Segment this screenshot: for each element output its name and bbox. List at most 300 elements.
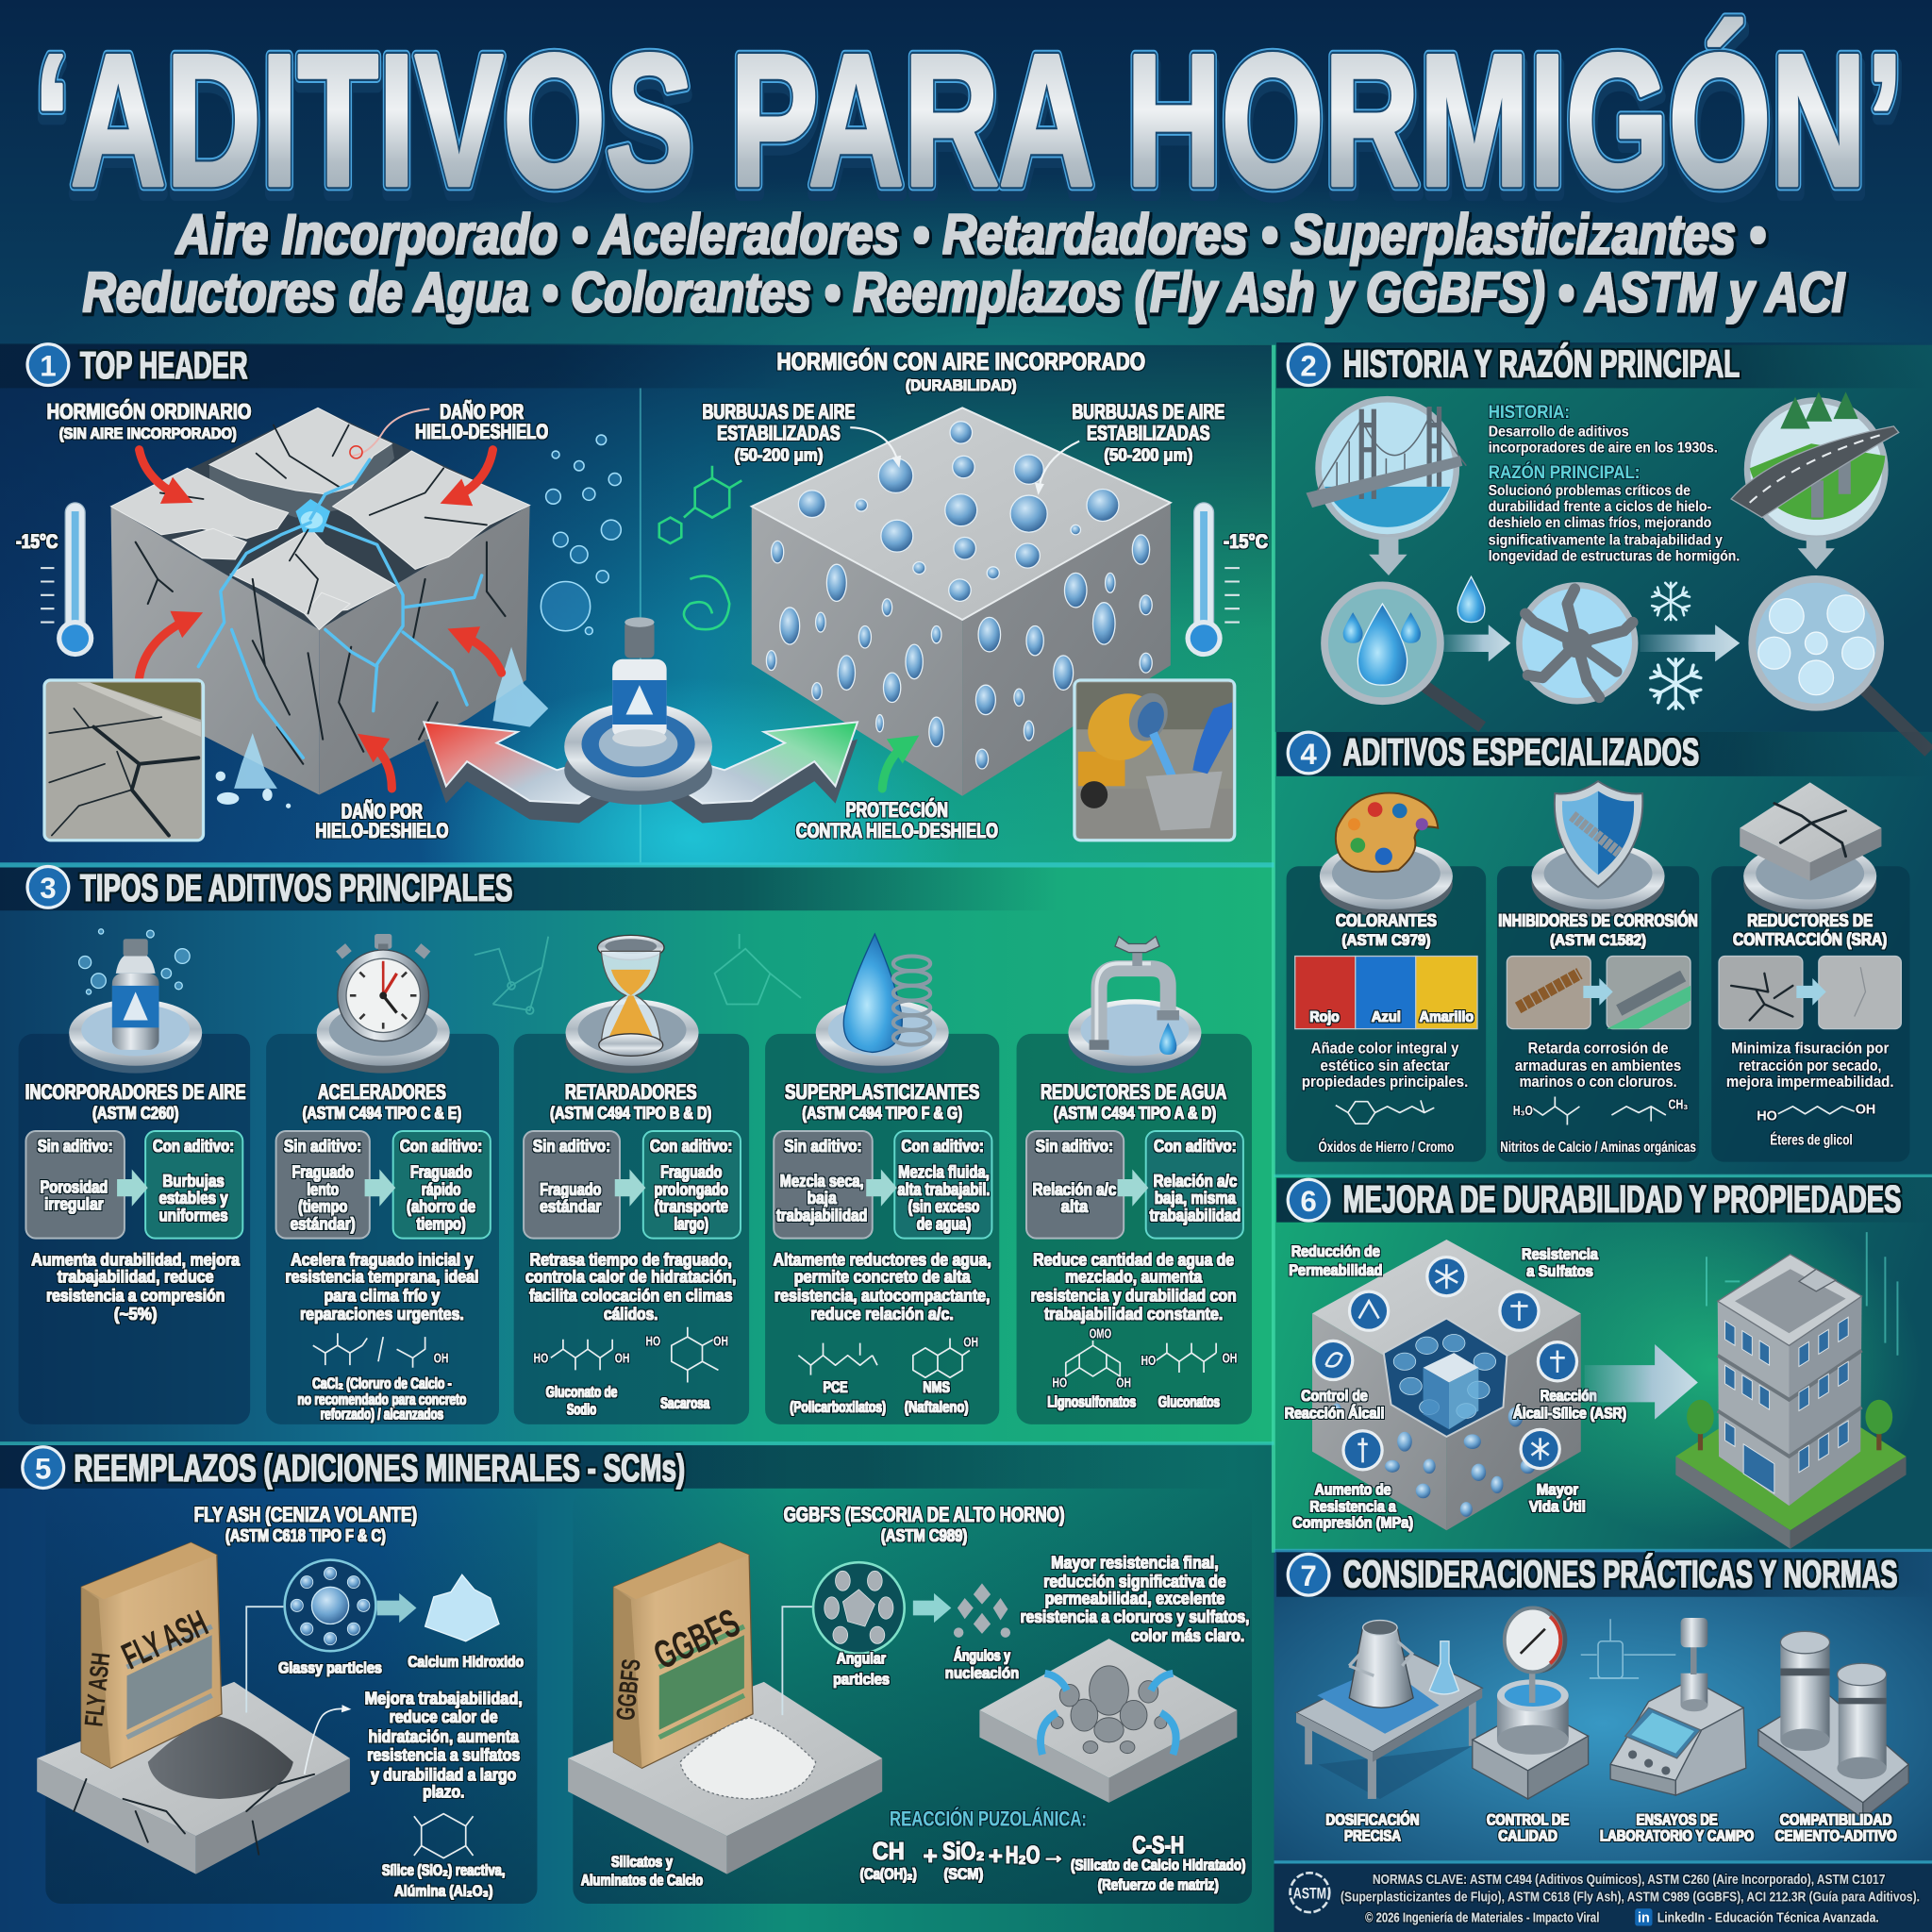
panel 7: consideraciones practicas <box>1276 1552 1932 1926</box>
labels around cube: Permeabilidad <box>1289 1261 1382 1279</box>
text: historia: HISTORIA: <box>1489 402 1570 423</box>
description: trabajabilidad constante. <box>1044 1304 1223 1324</box>
description: estético sin afectar <box>1321 1057 1450 1074</box>
comparison: Sin aditivo: <box>533 1136 610 1156</box>
photo: cracked pavement <box>44 680 204 841</box>
label: burbujas left: ESTABILIZADAS <box>717 421 841 444</box>
label: hormigon ordinario: HORMIGÓN ORDINARIO <box>47 398 251 424</box>
description: propiedades principales. <box>1302 1073 1468 1091</box>
comparison: alta <box>1061 1196 1089 1216</box>
label: Nitritos de Calcio / Aminas orgánicas <box>1500 1140 1696 1156</box>
comparison <box>25 1131 242 1239</box>
equation <box>860 1830 1245 1894</box>
comparison: Sin aditivo: <box>284 1136 361 1156</box>
description <box>285 1249 478 1324</box>
label: burbujas left <box>702 400 855 464</box>
equation: (Ca(OH)₂) <box>860 1865 917 1883</box>
labels: Calcium Hidroxido <box>408 1653 524 1671</box>
labels around cube: Álcali-Sílice (ASR) <box>1513 1404 1626 1422</box>
labels: CALIDAD <box>1498 1826 1557 1844</box>
labels around cube: Reacción <box>1541 1387 1597 1405</box>
icon: reaction slab <box>979 1639 1237 1803</box>
arrow: green protection <box>882 741 909 789</box>
heading 2: 2 <box>1300 349 1317 382</box>
icon: snowflake top <box>1652 583 1690 620</box>
equation: SiO₂ <box>942 1837 985 1865</box>
comparison: estándar <box>540 1196 601 1216</box>
arrow: down left <box>1369 537 1407 575</box>
molecules and labels: Sodio <box>567 1400 596 1418</box>
heading 3: TIPOS DE ADITIVOS PRINCIPALES <box>80 866 512 909</box>
icon: slab <box>37 1682 350 1874</box>
equation: → <box>1041 1840 1066 1869</box>
heading 3: 3 <box>40 872 57 905</box>
labels around cube: Reacción Álcali <box>1285 1404 1384 1422</box>
description <box>365 1688 523 1802</box>
molecules and labels <box>534 1327 728 1418</box>
thermometer right <box>1185 503 1240 657</box>
description: Minimiza fisuración por <box>1731 1040 1890 1058</box>
heading 5: 5 <box>35 1452 51 1485</box>
text: historia: durabilidad frente a ciclos de hielo- <box>1489 499 1711 515</box>
description: resistencia, autocompactante, <box>774 1285 990 1305</box>
description: Acelera fraguado inicial y <box>291 1249 474 1269</box>
comparison: tiempo) <box>416 1214 466 1234</box>
text: historia: incorporadores de aire en los 1930s. <box>1489 440 1718 456</box>
title: SUPERPLASTICIZANTES <box>785 1080 979 1104</box>
card: inhibidores <box>1497 781 1699 1162</box>
labels: COMPATIBILIDAD <box>1780 1810 1892 1828</box>
icon: calcium hydroxide <box>425 1574 499 1641</box>
comparison <box>276 1131 491 1239</box>
molecules and labels: HO <box>645 1334 660 1349</box>
title: INHIBIDORES DE CORROSIÓN <box>1498 910 1698 930</box>
icon: white powder pile <box>680 1718 816 1799</box>
description: Mayor resistencia final, <box>1051 1553 1219 1573</box>
arrow <box>377 1593 416 1623</box>
heading 4: 4 <box>1300 738 1317 771</box>
copyright <box>1365 1908 1879 1926</box>
label: hormigon ordinario <box>47 398 251 442</box>
molecules and label: CaCl₂ (Cloruro de Calcio - <box>312 1374 452 1392</box>
comparison: uniformes <box>158 1205 228 1224</box>
panel: fly ash <box>37 1491 537 1904</box>
description: resistencia y durabilidad con <box>1031 1285 1237 1305</box>
text: historia: Desarrollo de aditivos <box>1489 424 1629 440</box>
icon: astm logo: ASTM <box>1293 1885 1326 1903</box>
label: burbujas right: (50-200 μm) <box>1104 444 1192 464</box>
comparison: Con aditivo: <box>650 1136 732 1156</box>
equation: (Silicato de Calcio Hidratado) <box>1071 1857 1245 1874</box>
description <box>1726 1040 1894 1091</box>
arrow: water to ice <box>1441 625 1510 661</box>
description: mezclado, aumenta <box>1065 1267 1203 1287</box>
labels around cube: Reducción de <box>1291 1242 1380 1260</box>
description: para clima frío y <box>325 1285 441 1305</box>
icon: lab machine <box>1610 1618 1746 1795</box>
card: retardadores <box>514 935 749 1424</box>
icon: faucet <box>1068 937 1201 1074</box>
icon: ggbfs bag <box>610 1542 753 1768</box>
molecules and labels: OH <box>1223 1352 1237 1367</box>
card: reductores de agua <box>1017 937 1252 1424</box>
molecules and labels: Gluconatos <box>1158 1393 1220 1411</box>
title <box>25 1080 246 1123</box>
description: plazo. <box>423 1782 464 1802</box>
equation: H₂O <box>1006 1840 1040 1869</box>
icon: air entrained cube <box>752 408 1171 796</box>
comparison <box>774 1131 991 1239</box>
title: (ASTM C494 TIPO B & D) <box>550 1103 711 1123</box>
title: REDUCTORES DE AGUA <box>1041 1080 1226 1104</box>
card: reductores contraccion <box>1711 782 1909 1162</box>
description <box>31 1249 241 1324</box>
title ggbfs: GGBFS (ESCORIA DE ALTO HORNO) <box>784 1503 1064 1526</box>
icon: snowflake bottom <box>1651 659 1701 708</box>
comparison: (ahorro de <box>407 1196 475 1216</box>
heading 7: 7 <box>1300 1559 1317 1592</box>
labels around cube: Compresión (MPa) <box>1292 1514 1413 1532</box>
label: burbujas right: ESTABILIZADAS <box>1087 421 1210 444</box>
title <box>1041 1080 1226 1123</box>
icon: fly ash bag <box>78 1542 222 1768</box>
comparison: baja, misma <box>1155 1188 1237 1208</box>
comparison: Sin aditivo: <box>784 1136 862 1156</box>
description <box>1302 1040 1468 1091</box>
molecules: H₃O <box>1513 1104 1533 1119</box>
footer <box>1291 1872 1920 1926</box>
icon: additive bottle on platform <box>564 617 712 805</box>
panel 6: mejora de durabilidad <box>1276 1177 1932 1549</box>
title <box>785 1080 979 1123</box>
subtitle <box>83 203 1845 324</box>
molecules and labels: (Naftaleno) <box>905 1398 969 1416</box>
icon: bridge lens <box>1306 399 1466 537</box>
molecules and labels: Lignosulfonatos <box>1047 1393 1136 1411</box>
title: COLORANTES <box>1336 910 1437 930</box>
comparison images <box>1507 957 1690 1029</box>
molecule and label: Alúmina (Al₂O₃) <box>394 1882 492 1900</box>
title fly ash: FLY ASH (CENIZA VOLANTE) <box>194 1503 417 1526</box>
labels: DOSIFICACIÓN <box>1325 1810 1420 1828</box>
description: armaduras en ambientes <box>1515 1057 1681 1074</box>
heading: reaccion: REACCIÓN PUZOLÁNICA: <box>890 1807 1087 1831</box>
icon: ash pile <box>148 1716 293 1799</box>
label: proteccion: CONTRA HIELO-DESHIELO <box>796 819 998 842</box>
icon: cracked concrete cube <box>111 408 548 808</box>
label: -15C left: -15°C <box>16 531 58 553</box>
label: Óxidos de Hierro / Cromo <box>1319 1138 1454 1156</box>
icon: fly ash bag: FLY ASH <box>78 1651 115 1728</box>
arrow: down right <box>1798 537 1835 569</box>
card: superplasticizantes <box>765 934 999 1424</box>
label: burbujas right <box>1072 400 1224 464</box>
labels: ENSAYOS DE <box>1637 1810 1718 1828</box>
description: color más claro. <box>1131 1625 1244 1645</box>
description <box>525 1249 736 1324</box>
description: Añade color integral y <box>1311 1040 1459 1058</box>
card: aceleradores <box>266 934 499 1424</box>
description: mejora impermeabilidad. <box>1726 1073 1894 1091</box>
panel: ggbfs <box>568 1491 1252 1904</box>
heading 2: HISTORIA Y RAZÓN PRINCIPAL <box>1343 342 1740 386</box>
text: historia: significativamente la trabajabilidad y <box>1489 532 1723 548</box>
title: REDUCTORES DE <box>1747 910 1873 930</box>
arrow: ice to bubbles <box>1640 625 1740 661</box>
molecules and label: reforzado) / alcanzados <box>321 1406 443 1424</box>
molecules and label <box>297 1333 466 1424</box>
comparison: estándar) <box>291 1214 356 1234</box>
labels: CEMENTO-ADITIVO <box>1774 1826 1897 1844</box>
icon: cracked slab <box>1740 782 1881 917</box>
comparison: lento <box>307 1179 339 1199</box>
molecules and labels: HO <box>534 1352 548 1367</box>
description <box>774 1249 991 1324</box>
comparison: irregular <box>44 1194 104 1214</box>
pointer <box>305 1708 347 1774</box>
labels: particles <box>833 1670 890 1688</box>
comparison <box>1026 1131 1243 1239</box>
connector line <box>782 1607 813 1715</box>
molecules <box>1513 1096 1688 1124</box>
labels <box>833 1647 1019 1688</box>
description: permite concreto de alta <box>794 1267 971 1287</box>
label: hormigon con aire: (DURABILIDAD) <box>906 376 1017 394</box>
icons on cube <box>1312 1256 1578 1472</box>
description <box>1031 1249 1237 1324</box>
comparison: Sin aditivo: <box>38 1136 113 1156</box>
molecules and labels: OH <box>1116 1376 1131 1391</box>
comparison: Con aditivo: <box>901 1136 984 1156</box>
heading 4: ADITIVOS ESPECIALIZADOS <box>1343 730 1699 774</box>
icon: gauge <box>1473 1607 1589 1799</box>
icon: hourglass <box>566 935 699 1074</box>
icon: bubbles lens <box>1752 579 1929 752</box>
normas text <box>1341 1872 1920 1905</box>
comparison: Relación a/c <box>1033 1179 1116 1199</box>
label: silicatos: Silicatos y <box>611 1853 674 1871</box>
labels around cube: Resistencia <box>1522 1245 1599 1263</box>
comparison images <box>1719 957 1901 1029</box>
icon: building <box>1675 1232 1907 1549</box>
arrow: cube to building <box>1585 1344 1698 1420</box>
labels around cube: Aumento de <box>1315 1480 1391 1498</box>
comparison: Con aditivo: <box>400 1136 482 1156</box>
comparison: largo) <box>674 1214 708 1234</box>
description: (~5%) <box>114 1304 158 1324</box>
label: dano bottom: DAÑO POR <box>341 799 423 823</box>
description: marinos o con cloruros. <box>1519 1073 1677 1091</box>
icon: ice lens <box>1519 585 1635 701</box>
molecule and label <box>382 1814 506 1900</box>
title <box>1733 910 1887 949</box>
equation: (Refuerzo de matriz) <box>1098 1876 1219 1894</box>
green molecules <box>659 466 741 629</box>
heading 1: 1 <box>40 349 57 382</box>
labels: CONTROL DE <box>1487 1810 1569 1828</box>
icon: slump cone table <box>1296 1621 1482 1799</box>
thermometer left <box>41 503 93 657</box>
swatches <box>1295 957 1477 1029</box>
title fly ash: (ASTM C618 TIPO F & C) <box>225 1525 386 1545</box>
text: historia: longevidad de estructuras de hormigón. <box>1489 548 1740 564</box>
labels around cube: Resistencia a <box>1309 1498 1396 1516</box>
title: (ASTM C260) <box>92 1103 178 1123</box>
molecules and label: OH <box>434 1352 448 1367</box>
molecules and label: no recomendado para concreto <box>297 1391 466 1408</box>
comparison: Fraguado <box>660 1162 722 1182</box>
description: Altamente reductores de agua, <box>774 1249 991 1269</box>
title fly ash <box>194 1503 417 1545</box>
heading 3 <box>0 865 1059 910</box>
comparison <box>524 1131 741 1239</box>
icon: cutaway cube <box>1312 1240 1581 1530</box>
labels around cube: Mayor <box>1537 1480 1578 1498</box>
heading 5: REEMPLAZOS (ADICIONES MINERALES - SCMs) <box>74 1446 685 1490</box>
title <box>1498 910 1698 949</box>
molecules and labels <box>790 1336 978 1416</box>
comparison: trabajabilidad <box>776 1205 868 1224</box>
heading 1 <box>0 342 789 388</box>
molecules: CH₃ <box>1668 1098 1688 1113</box>
description: reduce calor de <box>390 1707 498 1726</box>
comparison: Mezcla fluida, <box>898 1162 990 1182</box>
panel 2: historia <box>1276 342 1932 752</box>
molecules and labels: PCE <box>823 1378 848 1396</box>
description: reduce relación a/c. <box>810 1304 954 1324</box>
title: INCORPORADORES DE AIRE <box>25 1080 246 1104</box>
heading 6: 6 <box>1300 1185 1317 1218</box>
panel 1: top header <box>0 342 1268 842</box>
description: resistencia a compresión <box>46 1285 225 1305</box>
text: historia <box>1489 402 1740 564</box>
description: Reduce cantidad de agua de <box>1033 1249 1234 1269</box>
comparison: de agua) <box>917 1214 971 1234</box>
description: Retarda corrosión de <box>1528 1040 1668 1058</box>
molecules and labels <box>1047 1326 1237 1411</box>
photo: mixer <box>1074 680 1235 841</box>
label: silicatos <box>581 1853 703 1889</box>
labels around cube: a Sulfatos <box>1526 1262 1593 1280</box>
bubbles near cracked cube <box>541 435 621 635</box>
title ggbfs <box>784 1503 1064 1545</box>
arrow: green to protected <box>653 722 858 823</box>
title: (ASTM C979) <box>1341 931 1430 949</box>
icon: road lens <box>1731 391 1899 539</box>
equation: + <box>923 1841 938 1870</box>
icon: stopwatch <box>317 934 450 1074</box>
description: retracción por secado, <box>1739 1057 1881 1074</box>
labels: Ángulos y <box>954 1647 1010 1665</box>
text: historia: Solucionó problemas críticos de <box>1489 483 1690 499</box>
label: dano bottom: HIELO-DESHIELO <box>315 819 448 842</box>
copyright: LinkedIn - Educación Técnica Avanzada. <box>1657 1910 1879 1926</box>
panel 5: reemplazos <box>0 1445 1252 1904</box>
labels: nucleación <box>945 1664 1019 1682</box>
description: Mejora trabajabilidad, <box>365 1688 523 1707</box>
labels around cube <box>1285 1242 1626 1532</box>
equation: + <box>989 1841 1003 1870</box>
title: (ASTM C494 TIPO C & E) <box>303 1103 461 1123</box>
molecule: OH <box>1856 1103 1875 1118</box>
labels <box>1325 1810 1897 1844</box>
swatches: Azul <box>1372 1009 1401 1025</box>
labels: PRECISA <box>1344 1826 1401 1844</box>
icon: cylinders <box>1758 1631 1908 1819</box>
icon: ggbfs bag: GGBFS <box>647 1600 746 1677</box>
description: reparaciones urgentes. <box>300 1304 464 1324</box>
comparison: Con aditivo: <box>153 1136 234 1156</box>
label: silicatos: Aluminatos de Calcio <box>581 1871 703 1889</box>
description <box>1515 1040 1681 1091</box>
description: resistencia a sulfatos <box>367 1744 520 1764</box>
description: trabajabilidad, reduce <box>58 1267 214 1287</box>
icon: palette <box>1320 793 1453 917</box>
molecules and labels: OH <box>713 1334 728 1349</box>
label: burbujas right: BURBUJAS DE AIRE <box>1072 400 1224 424</box>
equation: CH <box>873 1837 905 1865</box>
molecule <box>1336 1100 1434 1124</box>
comparison: (sin exceso <box>908 1196 979 1216</box>
comparison: Burbujas <box>162 1171 225 1191</box>
label: hormigon ordinario: (SIN AIRE INCORPORADO) <box>59 425 237 442</box>
comparison: Relación a/c <box>1154 1171 1237 1191</box>
title: (ASTM C494 TIPO F & G) <box>802 1103 962 1123</box>
molecules and labels: (Policarboxilatos) <box>790 1398 886 1416</box>
copyright: © 2026 Ingeniería de Materiales - Impacto Viral <box>1365 1910 1599 1926</box>
description: y durabilidad a largo <box>371 1764 516 1784</box>
description: reducción significativa de <box>1043 1571 1226 1591</box>
label: Éteres de glicol <box>1770 1130 1853 1148</box>
comparison: trabajabilidad <box>1150 1205 1241 1224</box>
label: burbujas left: (50-200 μm) <box>734 444 823 464</box>
label: hormigon con aire <box>777 347 1145 394</box>
description: cálidos. <box>604 1304 658 1324</box>
label: proteccion <box>796 798 998 842</box>
icon: water lens <box>1324 585 1482 727</box>
labels: LABORATORIO Y CAMPO <box>1600 1826 1754 1844</box>
molecules and labels: NMS <box>923 1378 950 1396</box>
description: Retrasa tiempo de fraguado, <box>530 1249 732 1269</box>
connector line <box>246 1607 283 1713</box>
label: burbujas left: BURBUJAS DE AIRE <box>702 400 855 424</box>
ghost sketch <box>1581 1619 1675 1678</box>
copyright: in <box>1638 1911 1650 1926</box>
molecules and labels: OH <box>963 1336 978 1351</box>
title <box>303 1080 461 1123</box>
pointers to bubbles <box>850 427 1079 491</box>
description: permeabilidad, excelente <box>1045 1589 1224 1608</box>
molecule and label: Sílice (SiO₂) reactiva, <box>382 1861 506 1879</box>
label: proteccion: PROTECCIÓN <box>846 798 948 822</box>
molecules and labels: Sacarosa <box>660 1394 710 1412</box>
comparison: Mezcla seca, <box>780 1171 864 1191</box>
title: (ASTM C1582) <box>1550 931 1646 949</box>
title: ACELERADORES <box>318 1080 446 1104</box>
label: dano top <box>415 400 548 443</box>
title <box>550 1080 711 1123</box>
icon: slab <box>568 1682 882 1874</box>
panel 3: tipos de aditivos <box>0 865 1252 1424</box>
comparison: alta trabajabil. <box>898 1179 990 1199</box>
icon: drop and spring <box>816 934 949 1074</box>
title: CONTRACCIÓN (SRA) <box>1733 929 1887 949</box>
heading 1: TOP HEADER <box>80 343 248 387</box>
panel 4: aditivos especializados <box>1276 730 1932 1162</box>
molecules and labels: HO <box>1141 1354 1156 1369</box>
icon: glassy particles <box>285 1560 375 1651</box>
label: -15C right: -15°C <box>1224 531 1268 553</box>
